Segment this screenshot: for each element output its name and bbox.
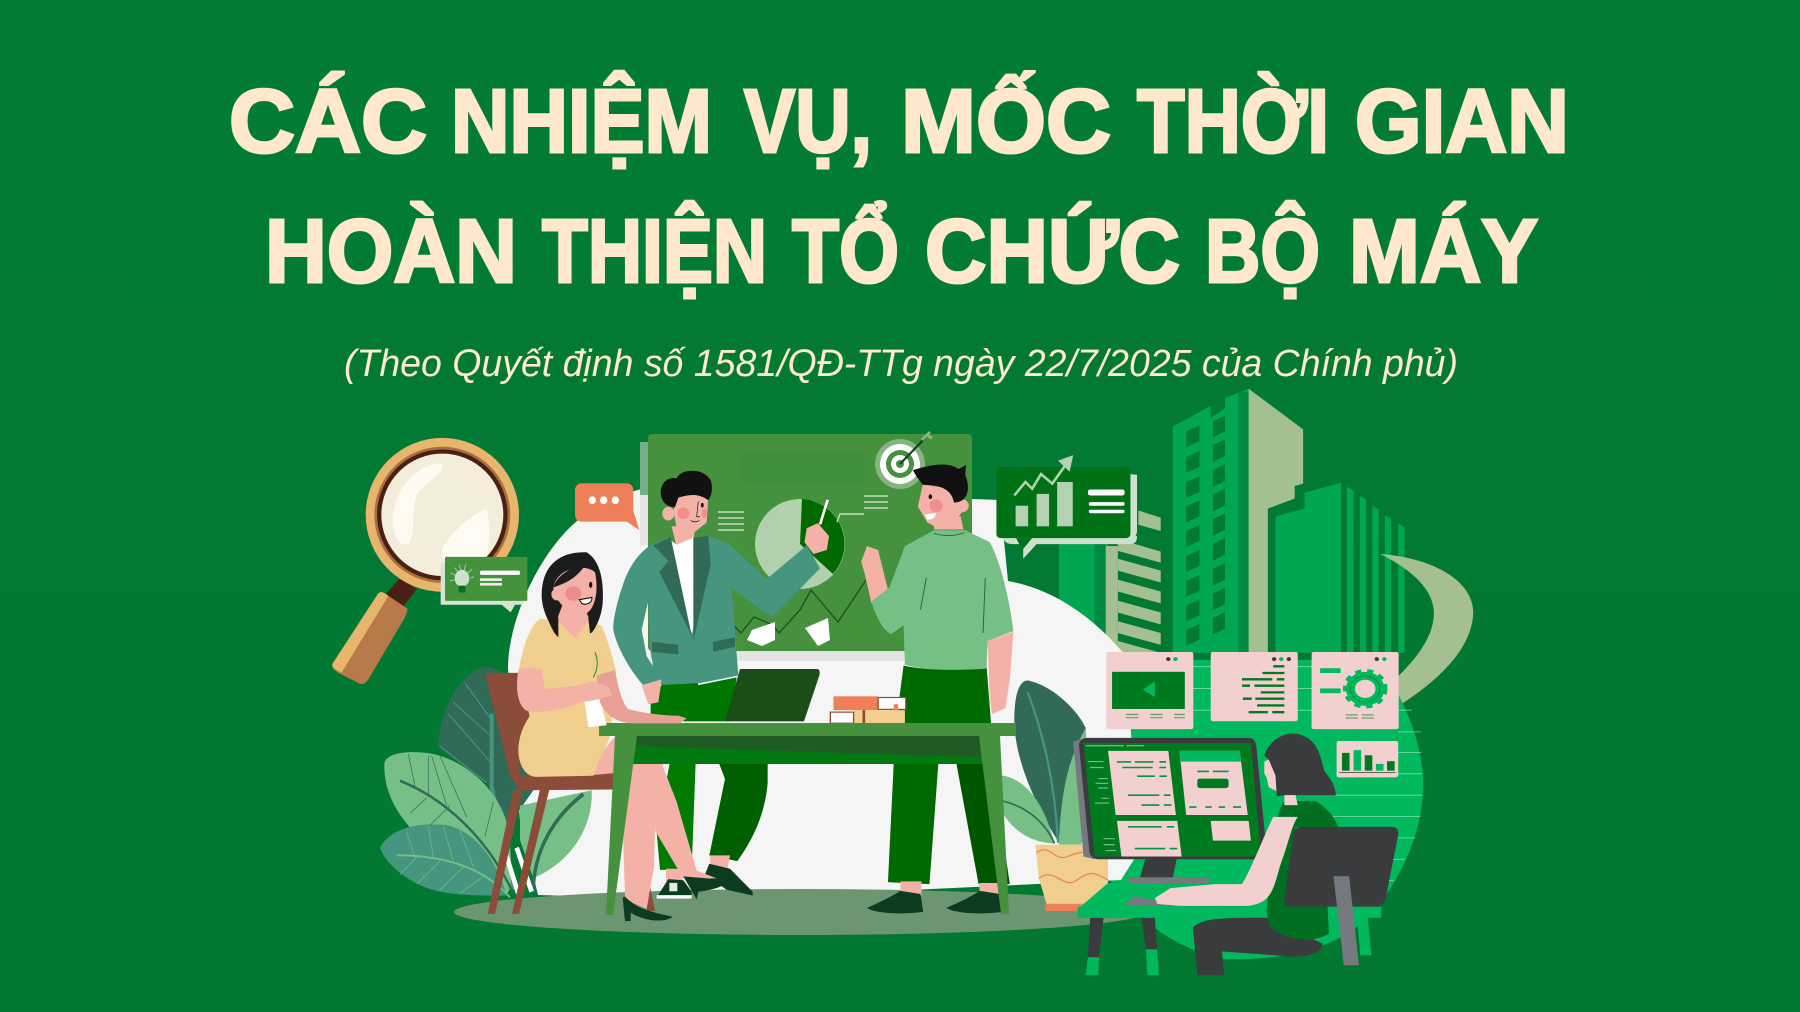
white backdrop blob	[508, 487, 1140, 900]
line chart on board	[733, 580, 866, 633]
pie chart	[755, 499, 845, 589]
monitor stand	[1124, 856, 1209, 906]
crescent leaf	[1380, 554, 1473, 706]
board header block	[741, 452, 865, 483]
computer workstation	[1073, 652, 1399, 975]
seated woman arms	[517, 668, 687, 727]
title: CÁC	[229, 71, 427, 172]
right man	[804, 464, 1108, 913]
man in sweater legs	[867, 665, 1010, 913]
man in jacket shirt and head	[661, 471, 712, 637]
plant leaves left	[380, 667, 592, 897]
pointing hand with pen	[804, 500, 829, 554]
books	[830, 696, 906, 723]
green circle backdrop with lines	[1086, 660, 1423, 959]
target icon	[875, 432, 932, 489]
presentation table	[599, 723, 1016, 915]
title: MÁY	[1349, 201, 1538, 302]
dashboard window: code	[1211, 652, 1298, 721]
title: BỘ	[1205, 200, 1320, 302]
presentation board	[640, 432, 972, 661]
man in jacket waist	[651, 660, 737, 721]
man in sweater arm and torso	[861, 530, 1013, 714]
laptop	[725, 669, 820, 721]
seated woman dress	[518, 603, 616, 777]
man in jacket legs	[657, 762, 768, 899]
office chair	[1284, 827, 1398, 965]
seated woman legs	[623, 764, 733, 921]
dashboard window: bars	[1337, 741, 1398, 777]
subtitle: (Theo Quyết định số 1581/QĐ-TTg ngày 22/7/2025 của Chính phủ)	[344, 343, 1458, 385]
seated woman head	[543, 553, 602, 637]
seated woman back hair	[542, 552, 603, 637]
dashboard window: settings	[1312, 652, 1399, 729]
city buildings	[1059, 389, 1404, 653]
magnifying glass	[332, 438, 519, 684]
title	[229, 70, 1569, 302]
title: NHIỆM	[451, 70, 712, 172]
monitor	[1073, 738, 1267, 859]
man in sweater head	[913, 464, 969, 529]
woman at computer	[1155, 733, 1338, 975]
idea speech bubble	[441, 557, 527, 612]
left scene	[332, 438, 820, 921]
chair	[485, 673, 655, 914]
title: HOÀN	[265, 201, 517, 302]
chart speech bubble	[996, 455, 1137, 559]
dashboard window: video	[1106, 652, 1193, 729]
title: MỐC	[901, 70, 1111, 172]
title: THỜI	[1137, 71, 1329, 172]
title: TỔ	[792, 200, 899, 302]
ground shadow	[454, 889, 1146, 935]
sticky notes	[747, 622, 775, 646]
board text lines	[718, 496, 888, 530]
desk	[1078, 883, 1381, 975]
title: THIỆN	[542, 200, 767, 302]
title: GIAN	[1355, 72, 1569, 172]
potted plant	[1002, 681, 1108, 911]
title: CHỨC	[925, 201, 1180, 302]
man in jacket blazer	[613, 536, 820, 704]
orange speech bubble	[575, 483, 639, 530]
title: VỤ,	[744, 72, 872, 172]
